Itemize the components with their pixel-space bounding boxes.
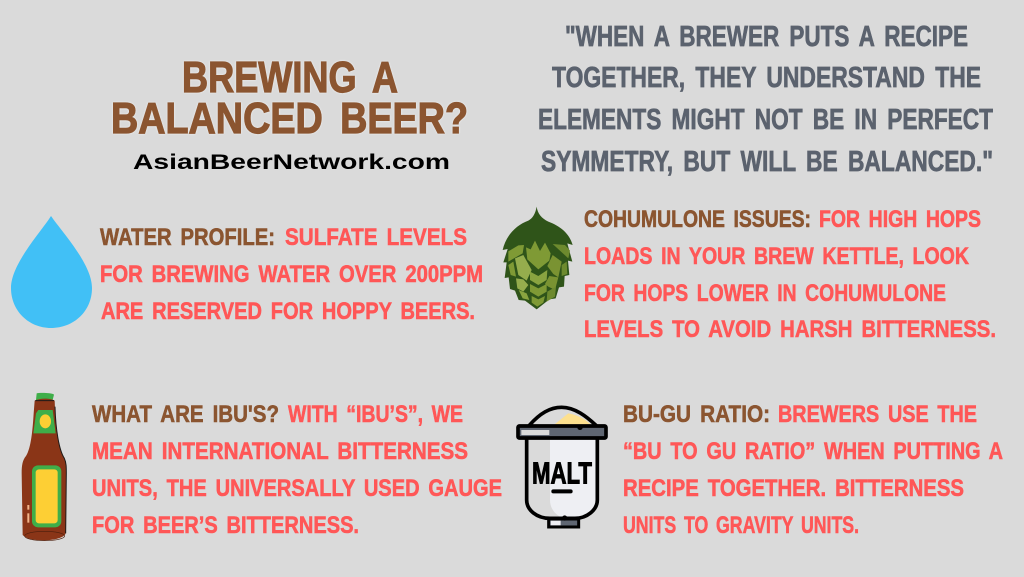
website url: AsianBeerNetwork.com xyxy=(133,150,450,174)
icon: water drop xyxy=(11,216,92,328)
text block: water profile: ARE RESERVED FOR HOPPY BEERS. xyxy=(101,298,475,325)
text block: BU-GU ratio: BREWERS USE THE xyxy=(778,401,977,428)
text block: water profile xyxy=(100,224,483,325)
title: BALANCED BEER? xyxy=(111,94,468,143)
text block: cohumulone issues: FOR HIGH HOPS xyxy=(819,206,981,233)
text block: what are IBUs: WHAT ARE IBU'S? xyxy=(92,401,279,428)
text block: what are IBUs: MEAN INTERNATIONAL BITTERNESS xyxy=(92,438,468,465)
text block: water profile: FOR BREWING WATER OVER 200PPM xyxy=(100,261,483,288)
quote xyxy=(538,21,993,178)
text block: water profile: WATER PROFILE: xyxy=(100,224,275,251)
text block: what are IBUs: FOR BEER’S BITTERNESS. xyxy=(92,512,359,539)
title: BREWING A xyxy=(182,53,398,102)
text block: BU-GU ratio: UNITS TO GRAVITY UNITS. xyxy=(623,512,859,539)
text block: what are IBUs: UNITS, THE UNIVERSALLY USED GAUGE xyxy=(92,475,502,502)
text block: BU-GU ratio: BU-GU RATIO: xyxy=(623,401,770,428)
icon: malt sack: MALT xyxy=(532,456,592,490)
icon: hop cone xyxy=(503,207,573,309)
text block: what are IBUs xyxy=(92,401,502,539)
text block: BU-GU ratio xyxy=(623,401,1003,539)
text block: cohumulone issues: COHUMULONE ISSUES: xyxy=(584,206,811,233)
text block: BU-GU ratio: RECIPE TOGETHER. BITTERNESS xyxy=(623,475,964,502)
title xyxy=(111,53,468,143)
text block: water profile: SULFATE LEVELS xyxy=(285,224,467,251)
icon: malt sack xyxy=(518,407,606,527)
text block: cohumulone issues xyxy=(584,206,996,343)
text block: what are IBUs: WITH “IBU’S”, WE xyxy=(288,401,463,428)
icon: beer bottle xyxy=(22,393,66,541)
